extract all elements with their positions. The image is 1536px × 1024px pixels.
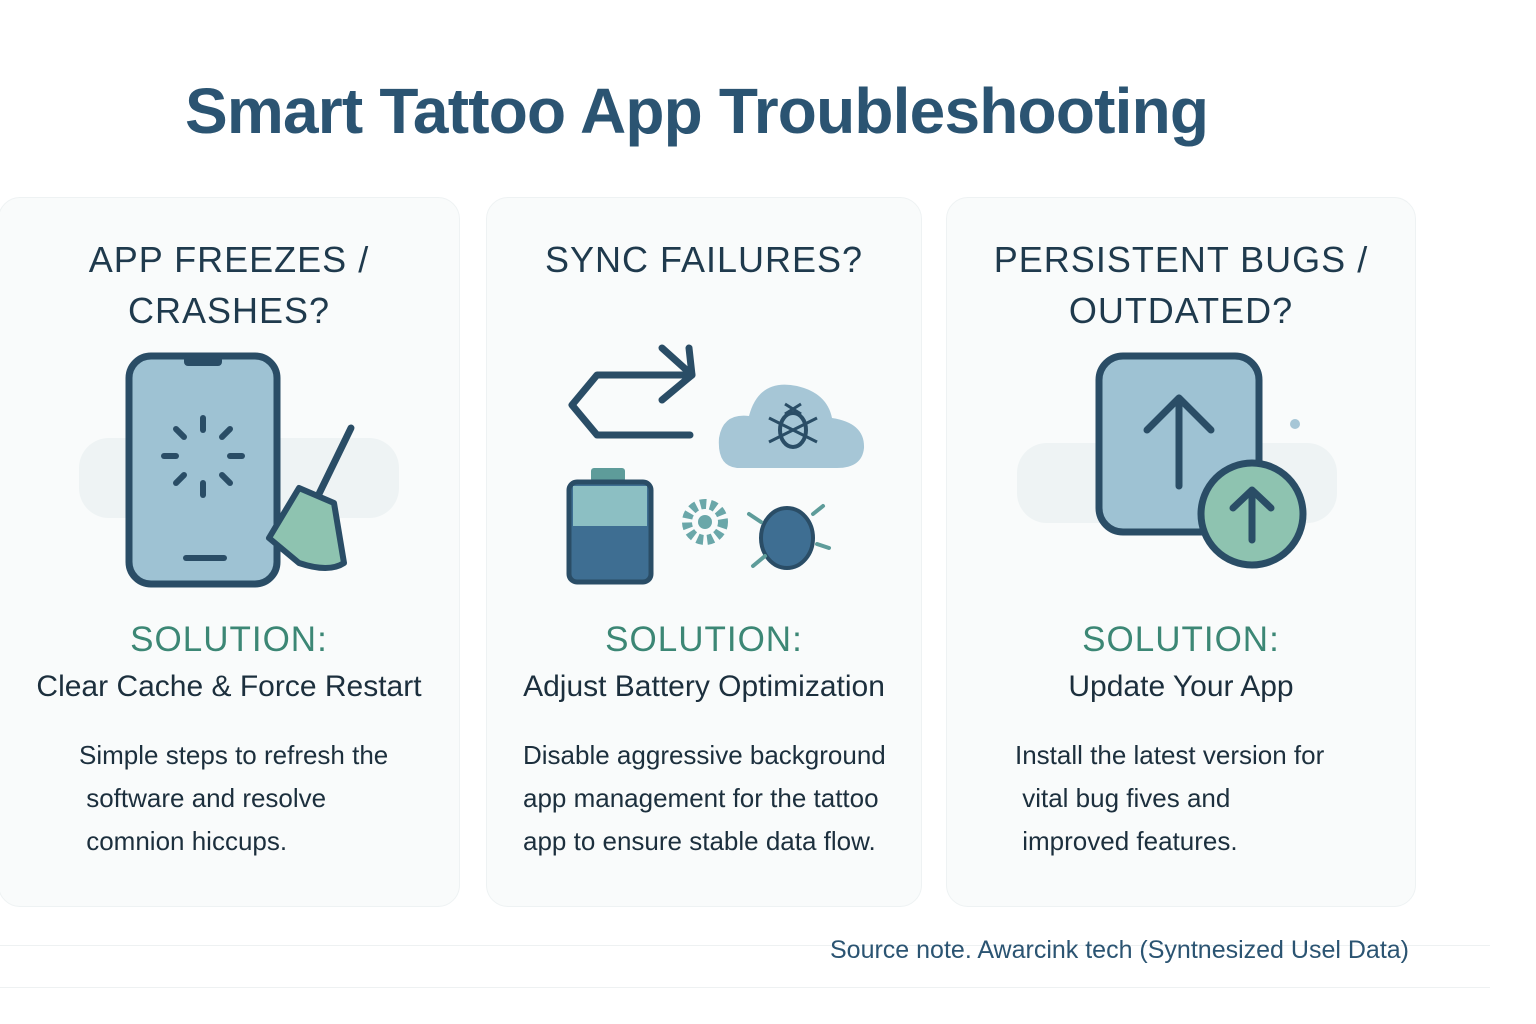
- panel: persistent bugs: [946, 197, 1416, 907]
- description: Disable aggressive background: [523, 740, 886, 770]
- icon: sync arrows, cloud bug, battery, gear, bug: [566, 344, 864, 584]
- description: [79, 740, 388, 856]
- description: improved features.: [1022, 826, 1238, 856]
- solution title: Update Your App: [1068, 670, 1294, 703]
- description: software and resolve: [86, 783, 326, 813]
- description: vital bug fives and: [1022, 783, 1230, 813]
- solution label: SOLUTION:: [130, 620, 328, 659]
- description: Simple steps to refresh the: [79, 740, 388, 770]
- description: app to ensure stable data flow.: [523, 826, 876, 856]
- solution label: SOLUTION:: [605, 620, 803, 659]
- icon: phone with broom: [79, 352, 399, 588]
- heading: OUTDATED?: [1069, 290, 1293, 331]
- solution label: SOLUTION:: [1082, 620, 1280, 659]
- solution title: Adjust Battery Optimization: [523, 670, 885, 703]
- icon: update arrows: [1017, 352, 1337, 568]
- heading: [994, 239, 1368, 331]
- solution title: Clear Cache & Force Restart: [36, 670, 422, 703]
- description: [523, 740, 886, 856]
- description: [1015, 740, 1324, 856]
- heading: CRASHES?: [128, 290, 330, 331]
- heading: APP FREEZES /: [89, 239, 369, 280]
- panel: sync failures: [486, 197, 922, 907]
- description: comnion hiccups.: [86, 826, 287, 856]
- heading: PERSISTENT BUGS /: [994, 239, 1368, 280]
- source note: Source note. Awarcink tech (Syntnesized Usel Data): [830, 936, 1409, 964]
- description: app management for the tattoo: [523, 783, 879, 813]
- panel: app freezes: [0, 197, 460, 907]
- heading: SYNC FAILURES?: [545, 239, 863, 280]
- description: Install the latest version for: [1015, 740, 1324, 770]
- heading: [88, 239, 369, 331]
- title: Smart Tattoo App Troubleshooting: [185, 75, 1208, 147]
